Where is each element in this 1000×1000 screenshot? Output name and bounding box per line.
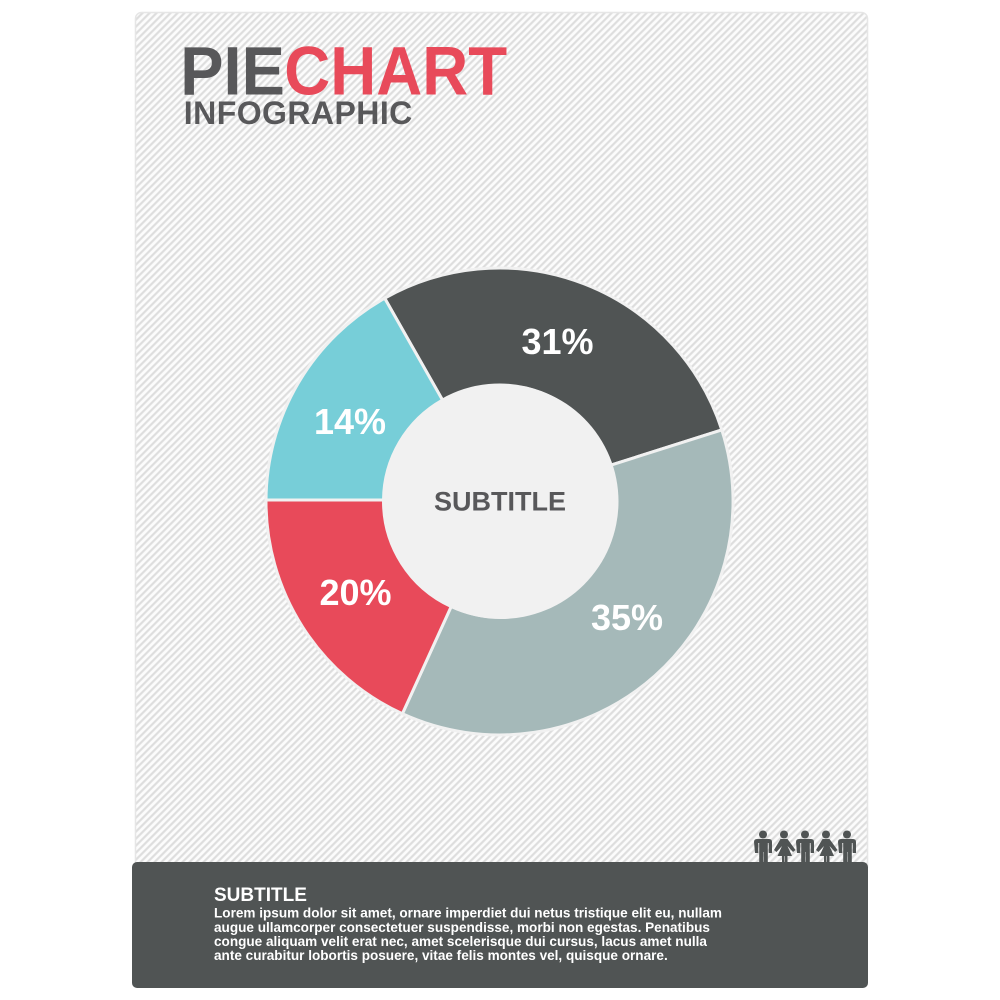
slice: 20% <box>266 500 451 714</box>
panel: striped background card <box>136 12 868 872</box>
icon: man <box>796 830 814 862</box>
title <box>180 33 507 131</box>
center label: SUBTITLE <box>434 486 566 516</box>
label: 20%: 20% <box>319 572 392 613</box>
footer body text <box>214 906 722 963</box>
slice: 14% <box>266 298 442 500</box>
footer body text: augue ullamcorper consectetuer suspendisse, morbi non egestas. Penatibus <box>214 920 710 935</box>
icon: woman <box>774 830 796 862</box>
title: CHART <box>284 33 507 110</box>
footer body text: Lorem ipsum dolor sit amet, ornare imperdiet dui netus tristique elit eu, nullam <box>214 906 722 920</box>
footer body text: ante curabitur lobortis posuere, vitae felis montes vel, quisque ornare. <box>214 948 668 963</box>
title: PIE <box>180 33 285 110</box>
donut chart <box>265 267 734 736</box>
center hole <box>384 384 618 619</box>
footer panel <box>132 862 868 988</box>
icon: man <box>838 830 856 862</box>
footer body text: congue aliquam velit erat nec, amet scelerisque dui cursus, lacus amet nulla <box>214 934 707 949</box>
slice: 35% <box>402 430 733 735</box>
icon: woman <box>816 830 838 862</box>
icon: man <box>754 830 772 862</box>
title: INFOGRAPHIC <box>184 95 413 131</box>
label: 31%: 31% <box>521 321 594 362</box>
label: 35%: 35% <box>591 597 663 638</box>
label: 14%: 14% <box>314 401 386 442</box>
slice: 31% <box>385 268 722 465</box>
footer heading: SUBTITLE <box>214 885 307 906</box>
icon: row of people <box>754 830 856 862</box>
